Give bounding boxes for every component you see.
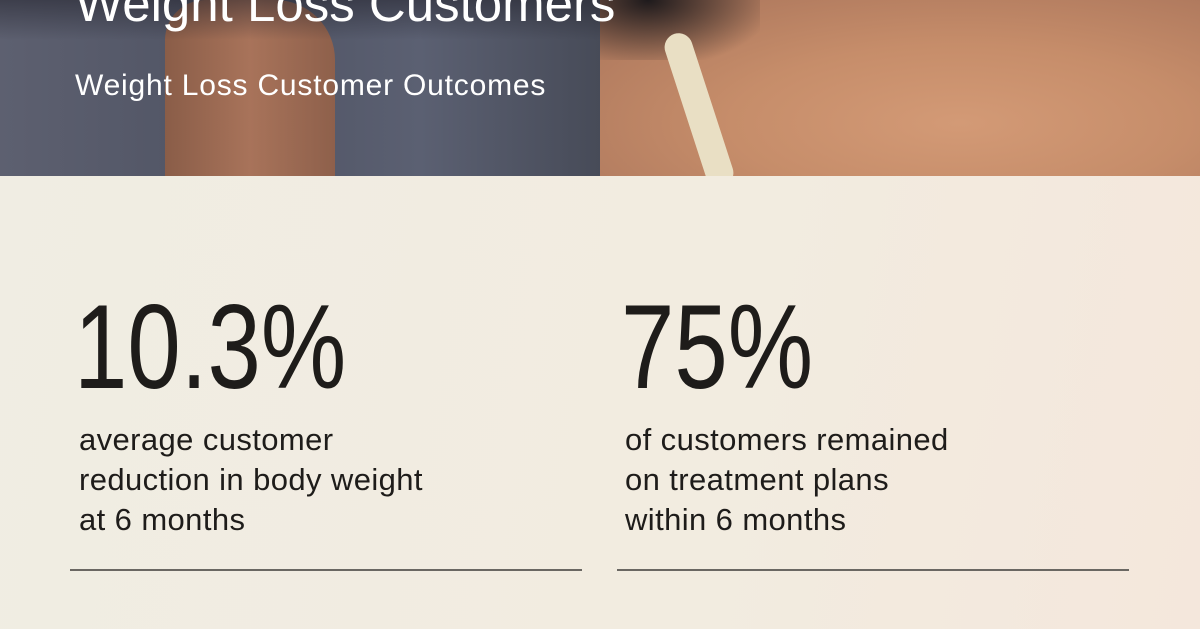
big number: 75% — [621, 280, 813, 414]
description: at 6 months — [79, 502, 245, 537]
subtitle: Weight Loss Customer Outcomes — [75, 69, 546, 102]
big number: 10.3% — [74, 280, 346, 414]
photo header — [0, 0, 1200, 176]
stat: 10.3% — [74, 280, 423, 537]
description — [79, 422, 423, 537]
description: of customers remained — [625, 422, 949, 457]
description: within 6 months — [625, 502, 846, 537]
photo: right woman — [600, 0, 1200, 176]
description: average customer — [79, 422, 334, 457]
description — [625, 422, 949, 537]
description: reduction in body weight — [79, 462, 423, 497]
stat: 75% — [621, 280, 949, 537]
description: on treatment plans — [625, 462, 889, 497]
photo: left man — [0, 0, 600, 176]
